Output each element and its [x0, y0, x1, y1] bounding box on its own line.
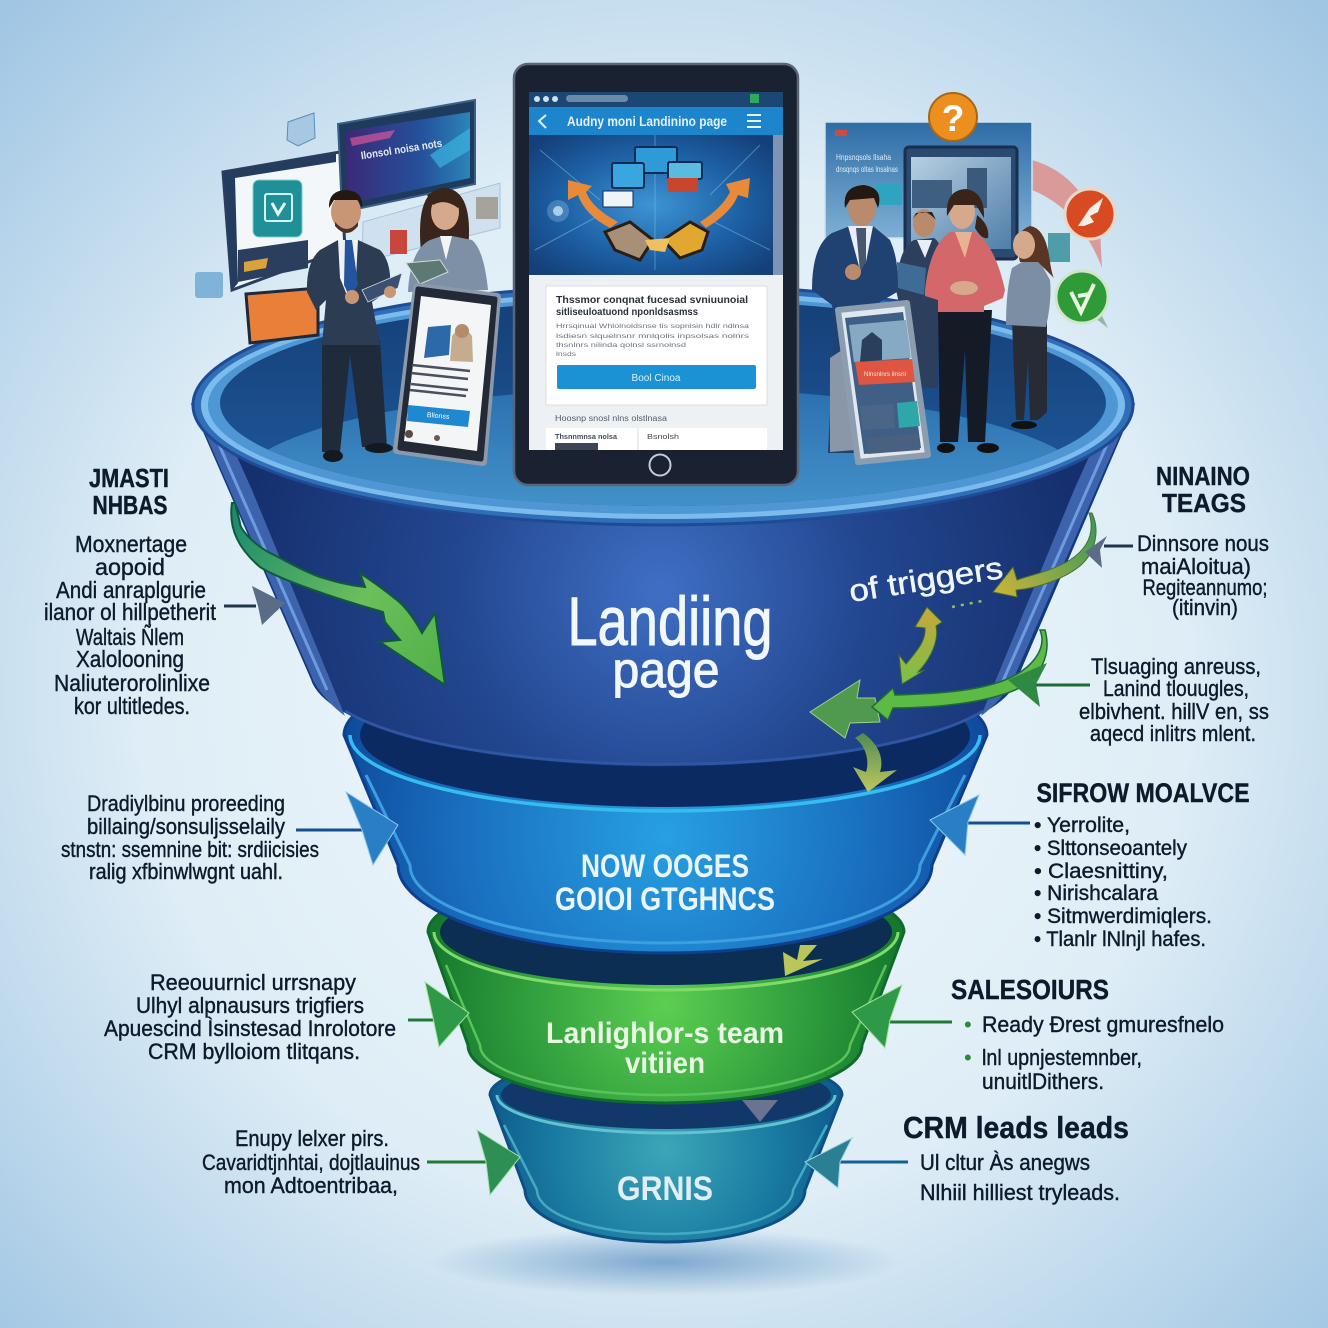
right bevel — [981, 410, 1131, 716]
funnel floor — [268, 393, 1058, 506]
label: of triggers: of triggers — [847, 550, 1005, 609]
icon: red badge — [1065, 189, 1115, 239]
pale lower panel — [362, 183, 500, 262]
callout: middle right: aqecd inlitrs mlent. — [1090, 721, 1256, 746]
person: man with tablet — [307, 190, 402, 462]
tablet: Bsnolsh — [647, 434, 679, 441]
icon: question mark: ? — [942, 98, 964, 139]
callout: second right: • Claesnittiny, — [1034, 860, 1168, 883]
curved two-way arrow — [899, 607, 942, 684]
callout: bottom left: Cavaridtjnhtai, dojtlauinus — [202, 1150, 420, 1175]
phone right: Nlnsnlnrs ilnsnl — [864, 372, 906, 378]
large muted arrowhead — [810, 680, 880, 738]
callout: top left: Waltais Ñlem — [76, 624, 184, 650]
callout: second right: • Nirishcalara — [1034, 882, 1158, 905]
callout: middle right — [1008, 654, 1269, 746]
phone left — [397, 287, 497, 462]
callout: second left: stnstn: ssemnine bit: srdiicisies — [61, 837, 319, 862]
callout: middle right: Tlsuaging anreuss, — [1091, 654, 1261, 679]
label: Lanlighlor-s team vitiien: vitiien — [625, 1047, 705, 1080]
people group right — [812, 185, 1054, 453]
callout: bottom left — [202, 1126, 520, 1198]
callout: second right: • Slttonseoantely — [1034, 837, 1187, 860]
arrow — [930, 795, 1030, 855]
label: Lanlighlor-s team vitiien: Lanlighlor-s team — [546, 1017, 784, 1050]
arrow — [1085, 536, 1133, 568]
callout: top left: Andi anraplgurie — [56, 577, 206, 603]
phone button: Bllonss — [427, 412, 450, 421]
funnel tier 1: landing page — [193, 285, 1133, 765]
callout: second right: • Tlanlr lNlnjl hafes. — [1034, 928, 1206, 951]
callout: third right: • — [964, 1045, 972, 1070]
callout: top left: Moxnertage — [75, 531, 187, 557]
callout: third left: Apuescind Ìsinstesad Inrolotore — [104, 1016, 396, 1041]
right screens and icons — [825, 93, 1115, 328]
green curved arrow — [872, 630, 1047, 720]
callout: top right: Dinnsore nous — [1137, 531, 1269, 556]
right screens and icons: dnsqnqs oltas lnsalnas — [836, 165, 898, 174]
callout: bottom right: CRM leads leads — [903, 1110, 1129, 1145]
tablet: thsnlnrs nilinda qolnsl ssrnolnsd — [556, 342, 687, 349]
callout: bottom right: Nlhiil hilliest tryleads. — [920, 1180, 1120, 1205]
tablet: Hrrsqinual Whlolnoldsnse tis sopnlsin hdlr ndlnsa — [556, 323, 750, 330]
arrow — [296, 792, 398, 865]
arrow — [224, 586, 285, 625]
left screens — [195, 100, 500, 343]
tablet: lnsds — [556, 351, 577, 358]
menu icon — [747, 115, 761, 127]
funnel interior — [220, 300, 1106, 506]
person: woman in red — [925, 189, 1005, 453]
callout: bottom right: Ul cltur Às anegws — [920, 1150, 1090, 1175]
callout: middle right: elbivhent. hillV en, ss — [1079, 699, 1269, 724]
tablet: Thsnnmnsa nolsa — [555, 432, 618, 441]
yellow arrow to triggers — [993, 513, 1096, 597]
callout: second right: • Sitmwerdimiqlers. — [1034, 905, 1212, 928]
icon: question mark — [929, 93, 977, 141]
callout: second left: Dradiylbinu proreeding — [87, 791, 285, 816]
tablet copy card — [546, 286, 767, 405]
label: Landing page: page — [612, 642, 720, 698]
left screens: Ilonsol noisa nots — [360, 138, 443, 162]
tablet button — [557, 365, 756, 389]
label: NOW OOGES GOIOI GTGHNCS: NOW OOGES — [581, 848, 749, 884]
callout: top right: maiAloitua) — [1141, 554, 1251, 579]
callout: third right: lnl upnjestemnber, — [982, 1045, 1142, 1070]
callout: middle right: Lanind tlouugles, — [1103, 676, 1249, 701]
arrow — [427, 1130, 520, 1195]
yellow arrow dropping into tier 2 — [853, 733, 897, 792]
tablet title: Audny moni Landinino page — [567, 113, 727, 129]
funnel tier 3: green — [428, 872, 904, 1103]
tablet: sitliseuloatuond nponldsasmss — [556, 307, 698, 318]
right arrow cluster — [810, 513, 1096, 738]
icon: green badge — [1056, 271, 1108, 328]
callout: third left: Reeouurnicl urrsnapy — [150, 970, 356, 995]
callout: top right: TEAGS — [1162, 488, 1246, 518]
callout: bottom left: mon Adtoentribaa, — [224, 1173, 398, 1198]
label: NOW OOGES GOIOI GTGHNCS: GOIOI GTGHNCS — [555, 881, 775, 917]
person: man behind — [896, 209, 950, 388]
person: man in suit — [812, 185, 898, 453]
arrow — [408, 982, 469, 1047]
arrow — [852, 985, 952, 1048]
callout: third right: unuitlDithers. — [982, 1069, 1104, 1094]
callout: top right: (itinvin) — [1172, 595, 1238, 620]
callout: third right — [852, 974, 1224, 1094]
callout: top left: JMASTI — [89, 463, 169, 493]
callout: top left: Naliuterorolinlixe — [54, 670, 210, 696]
callout: third right: Ready Ðrest gmuresfnelo — [982, 1012, 1224, 1037]
right screens and icons: Hnpsnqsols Ilsaha — [836, 153, 891, 162]
tablet: Thssmor conqnat fucesad svniuunoial — [556, 295, 748, 306]
callout: bottom right — [805, 1110, 1129, 1205]
callout: third left: CRM bylloiom tlitqans. — [148, 1039, 360, 1064]
callout: top left: NHBAS — [92, 490, 168, 520]
callout: top left — [44, 463, 285, 719]
tablet: Hoosnp snosl nlns olstlnasa — [555, 414, 668, 423]
funnel rim — [193, 285, 1133, 525]
phone right — [830, 303, 928, 462]
callout: top left: aopoid — [95, 554, 165, 580]
tablet: lsdiesn slquelnsnr mnlqolis inpsolsas nolnrs — [556, 333, 750, 340]
callout: top right: NINAINO — [1156, 461, 1250, 491]
small grey arrow between green and teal tiers — [742, 1100, 778, 1122]
callout: second right: SIFROW MOALVCE — [1036, 778, 1250, 808]
person: woman at right — [1006, 226, 1054, 429]
callout: second left — [61, 791, 398, 884]
label: Landing page: Landiing — [568, 583, 772, 660]
arrow — [805, 1138, 908, 1188]
orange picture card — [246, 288, 318, 343]
callout: top right: Regiteannumo; — [1142, 575, 1268, 600]
callout: second right — [930, 778, 1250, 951]
funnel tier 4: teal — [490, 1055, 842, 1242]
tablet: Bool Cinoa — [632, 373, 681, 384]
callout: top right — [1085, 461, 1269, 620]
floating chip icons — [195, 272, 223, 298]
callout: top left: ilanor ol hillpetherit — [44, 599, 217, 625]
funnel tier 2: blue — [344, 655, 987, 953]
ground shadow — [430, 1228, 900, 1296]
left green arrow on funnel — [231, 503, 445, 685]
callout: third left — [104, 970, 469, 1064]
small yellow-green arrow into tier 3 — [783, 945, 823, 976]
callout: third right: SALESOIURS — [951, 974, 1109, 1005]
white web panel — [223, 152, 345, 290]
callout: top left: kor ultitledes. — [74, 693, 190, 719]
callout: second left: ralig xfbinwlwgnt uahl. — [89, 859, 283, 884]
callout: second right: • Yerrolite, — [1034, 814, 1130, 837]
purple promo monitor — [338, 100, 475, 212]
callout: second left: billaing/sonsuljsselaily — [87, 814, 285, 839]
phone button — [407, 405, 470, 427]
back chevron — [539, 115, 546, 128]
hero image — [529, 135, 773, 275]
callout: top left: Xalolooning — [76, 646, 184, 672]
person: woman with tablet — [406, 188, 488, 292]
label: GRNIS: GRNIS — [617, 1170, 713, 1208]
callout: third left: Ulhyl alpnausurs trigfiers — [136, 993, 364, 1018]
tablet — [514, 64, 798, 485]
arrow — [1008, 663, 1090, 707]
left bevel — [195, 410, 345, 716]
callout: third right: • — [964, 1012, 972, 1037]
dotted trail — [952, 600, 987, 607]
callout: bottom left: Enupy lelxer pirs. — [235, 1126, 389, 1151]
